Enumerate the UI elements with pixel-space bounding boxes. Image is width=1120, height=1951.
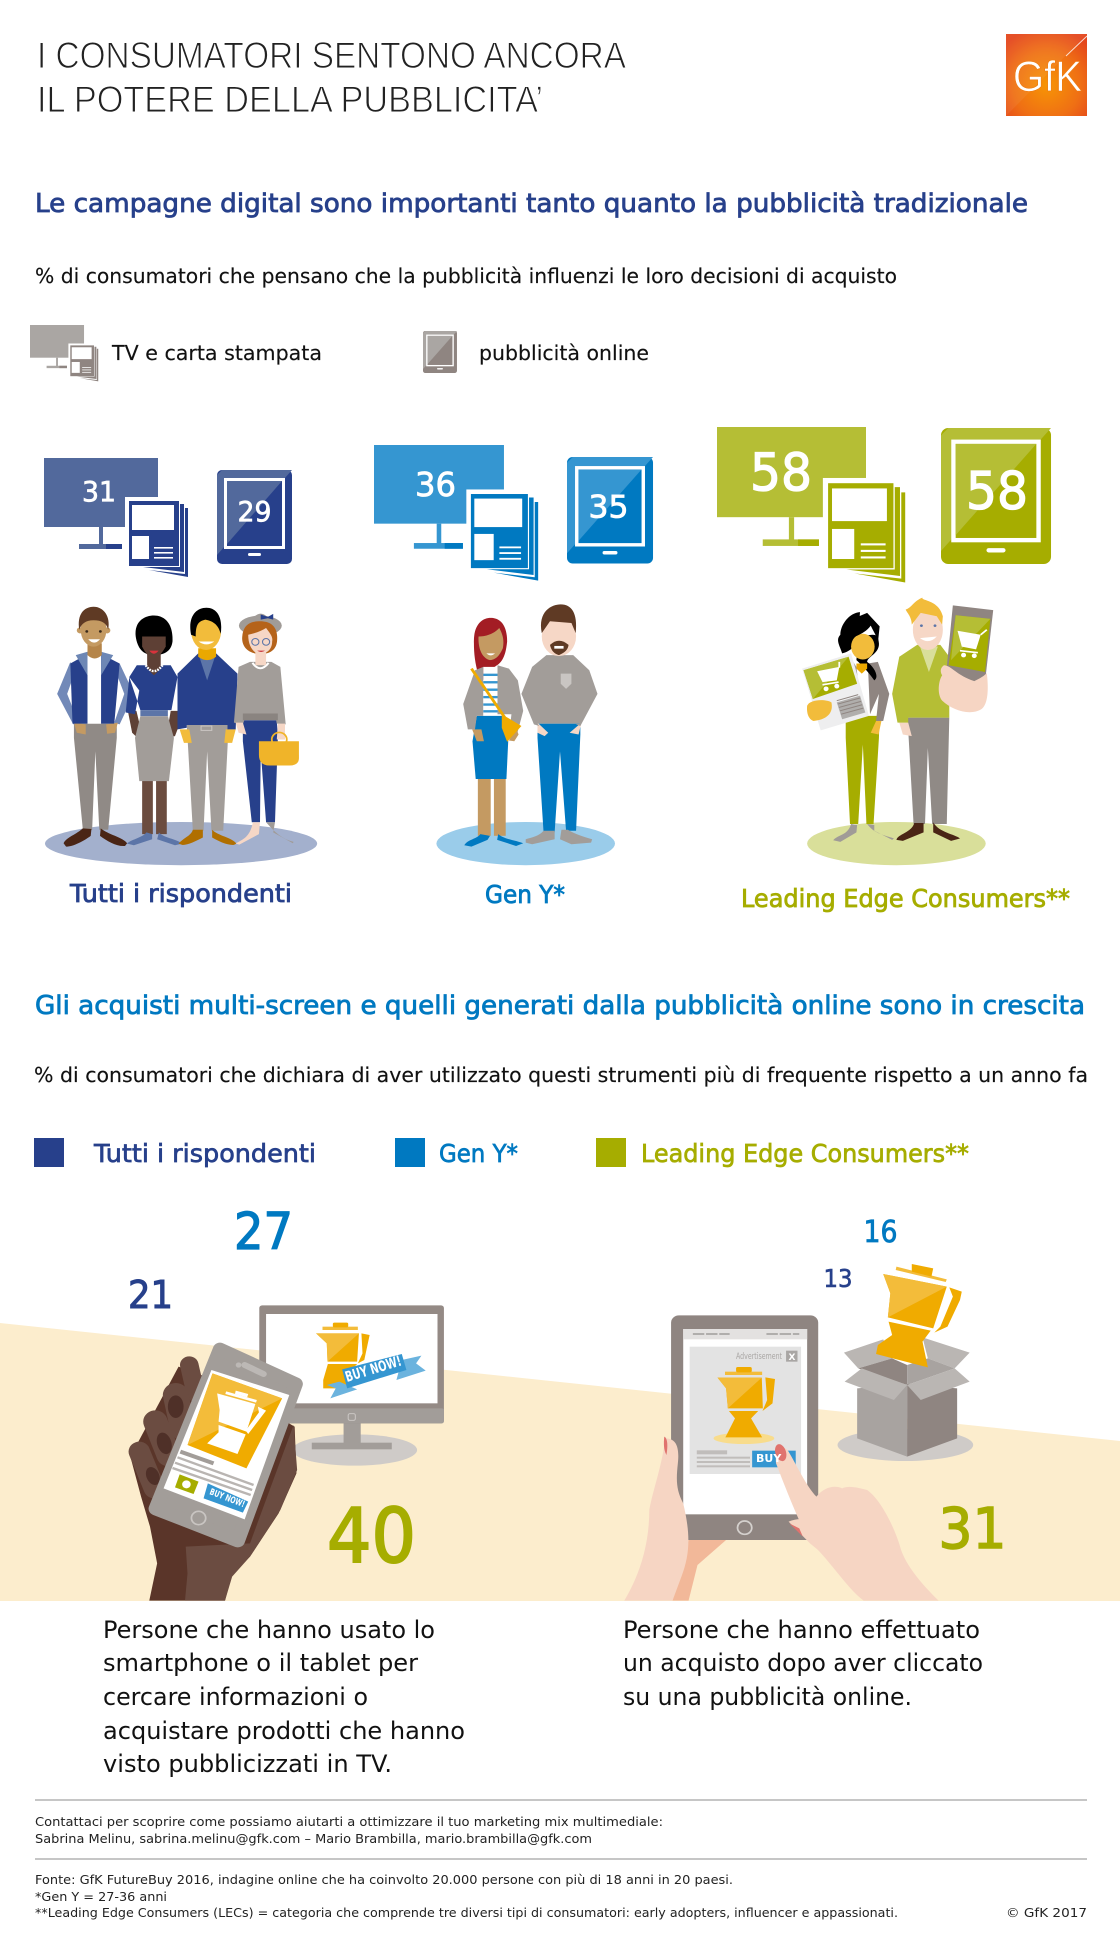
title: I CONSUMATORI SENTONO ANCORA <box>37 35 626 76</box>
legend: segments <box>34 1138 969 1168</box>
text block: smartphone use: acquistare prodotti che hanno <box>103 1717 465 1745</box>
stat icons: leading edge consumers <box>717 427 1051 585</box>
contact text: Sabrina Melinu, sabrina.melinu@gfk.com – Mario Brambilla, mario.brambilla@gfk.com <box>35 1831 592 1846</box>
tablet icon <box>567 457 653 564</box>
text block: smartphone use: cercare informazioni o <box>103 1683 368 1711</box>
hand holding phone <box>130 1349 297 1601</box>
GfK logo <box>1006 34 1087 116</box>
illustration: phone and tv shopping <box>130 1305 444 1601</box>
illustration: four respondents <box>45 607 317 865</box>
value 36: 36 <box>415 465 456 504</box>
button text: BUY <box>756 1452 782 1465</box>
label: gen y: Gen Y* <box>485 880 565 909</box>
hands <box>624 1437 939 1601</box>
stat icons: tutti i rispondenti <box>44 458 292 579</box>
value 31: 31 <box>82 475 116 508</box>
box with blender <box>837 1264 973 1461</box>
text block: smartphone use: Persone che hanno usato lo <box>103 1616 435 1644</box>
source notes: Fonte: GfK FutureBuy 2016, indagine online che ha coinvolto 20.000 persone con più di 18 anni in 20 paesi. <box>35 1872 733 1887</box>
person: woman with necklace <box>126 616 182 845</box>
stat: 13: 13 <box>824 1264 852 1293</box>
swatch: gen y <box>395 1138 425 1167</box>
stat: 40: 40 <box>327 1492 416 1580</box>
illustration: gen y couple <box>436 604 615 865</box>
tv monitor <box>259 1305 444 1466</box>
title: IL POTERE DELLA PUBBLICITA’ <box>37 79 543 120</box>
subheading: section 1: % di consumatori che pensano che la pubblicità influenzi le loro decisioni di acquisto <box>35 264 897 288</box>
tablet <box>671 1315 818 1540</box>
title <box>37 35 626 120</box>
cream background band <box>0 1323 1120 1601</box>
source notes: **Leading Edge Consumers (LECs) = categoria che comprende tre diversi tipi di consumatori: early adopters, influencer e appassionati. <box>35 1905 898 1920</box>
advertisement label: Advertisement <box>736 1352 782 1362</box>
value 35: 35 <box>588 490 628 526</box>
legend label: leading edge: Leading Edge Consumers** <box>641 1139 969 1168</box>
tablet icon <box>941 428 1051 564</box>
text block: online purchase: un acquisto dopo aver cliccato <box>623 1649 983 1677</box>
close button label: X <box>788 1353 796 1363</box>
value 58: 58 <box>966 462 1028 522</box>
legend: media types <box>30 325 649 382</box>
swatch: tutti i rispondenti <box>34 1138 64 1167</box>
stat: 21: 21 <box>128 1273 173 1317</box>
person: man with phone <box>892 598 993 841</box>
legend label: gen y: Gen Y* <box>439 1139 518 1168</box>
person: woman with magazine <box>802 612 894 842</box>
monitor and print icon <box>717 427 909 585</box>
text block: smartphone use: visto pubblicizzati in TV. <box>103 1750 392 1778</box>
stat: 27: 27 <box>234 1203 293 1262</box>
GfK logo: GfK <box>1013 53 1082 101</box>
heading: section 1: Le campagne digital sono importanti tanto quanto la pubblicità tradizionale <box>35 189 1028 219</box>
ribbon text: BUY NOW! <box>343 1354 404 1386</box>
text block: smartphone use: smartphone o il tablet per <box>103 1649 418 1677</box>
swatch: leading edge <box>596 1138 626 1167</box>
value 58: 58 <box>750 444 812 504</box>
stat: 31: 31 <box>938 1497 1006 1562</box>
heading: section 2: Gli acquisti multi-screen e quelli generati dalla pubblicità online sono in crescita <box>35 991 1085 1021</box>
source notes <box>35 1872 898 1920</box>
legend label: online: pubblicità online <box>479 341 649 365</box>
monitor and print icon <box>374 445 542 583</box>
icon: TV and print <box>30 325 100 382</box>
monitor and print icon <box>44 458 191 579</box>
text block: online purchase: Persone che hanno effettuato <box>623 1616 980 1644</box>
label: tutti i rispondenti: Tutti i rispondenti <box>69 879 292 908</box>
person: man in navy jacket <box>177 608 237 845</box>
text block: smartphone use <box>103 1616 465 1778</box>
tablet icon <box>217 470 292 564</box>
label: leading edge consumers: Leading Edge Consumers** <box>741 884 1070 913</box>
person: man in vest <box>57 607 134 847</box>
stat icons: gen y <box>374 445 653 583</box>
illustration: leading edge couple <box>802 598 993 865</box>
stat: 16: 16 <box>864 1215 898 1250</box>
text block: online purchase: su una pubblicità online. <box>623 1683 912 1711</box>
person: woman with red hair <box>463 618 523 847</box>
person: woman with hat and bag <box>234 614 299 845</box>
legend label: tutti i rispondenti: Tutti i rispondenti <box>93 1139 316 1168</box>
legend label: TV and print: TV e carta stampata <box>111 341 322 365</box>
source notes: *Gen Y = 27-36 anni <box>35 1889 167 1904</box>
subheading: section 2: % di consumatori che dichiara di aver utilizzato questi strumenti più di frequente rispetto a un anno fa <box>34 1063 1088 1087</box>
contact text <box>35 1814 663 1846</box>
copyright: © GfK 2017 <box>1006 1905 1087 1920</box>
button text: BUY NOW! <box>208 1487 246 1510</box>
icon: online tablet <box>423 331 457 373</box>
illustration: tablet and box <box>624 1264 973 1601</box>
text block: online purchase <box>623 1616 983 1711</box>
person: man with beard <box>521 604 597 844</box>
contact text: Contattaci per scoprire come possiamo aiutarti a ottimizzare il tuo marketing mix multimediale: <box>35 1814 663 1829</box>
value 29: 29 <box>238 495 272 528</box>
